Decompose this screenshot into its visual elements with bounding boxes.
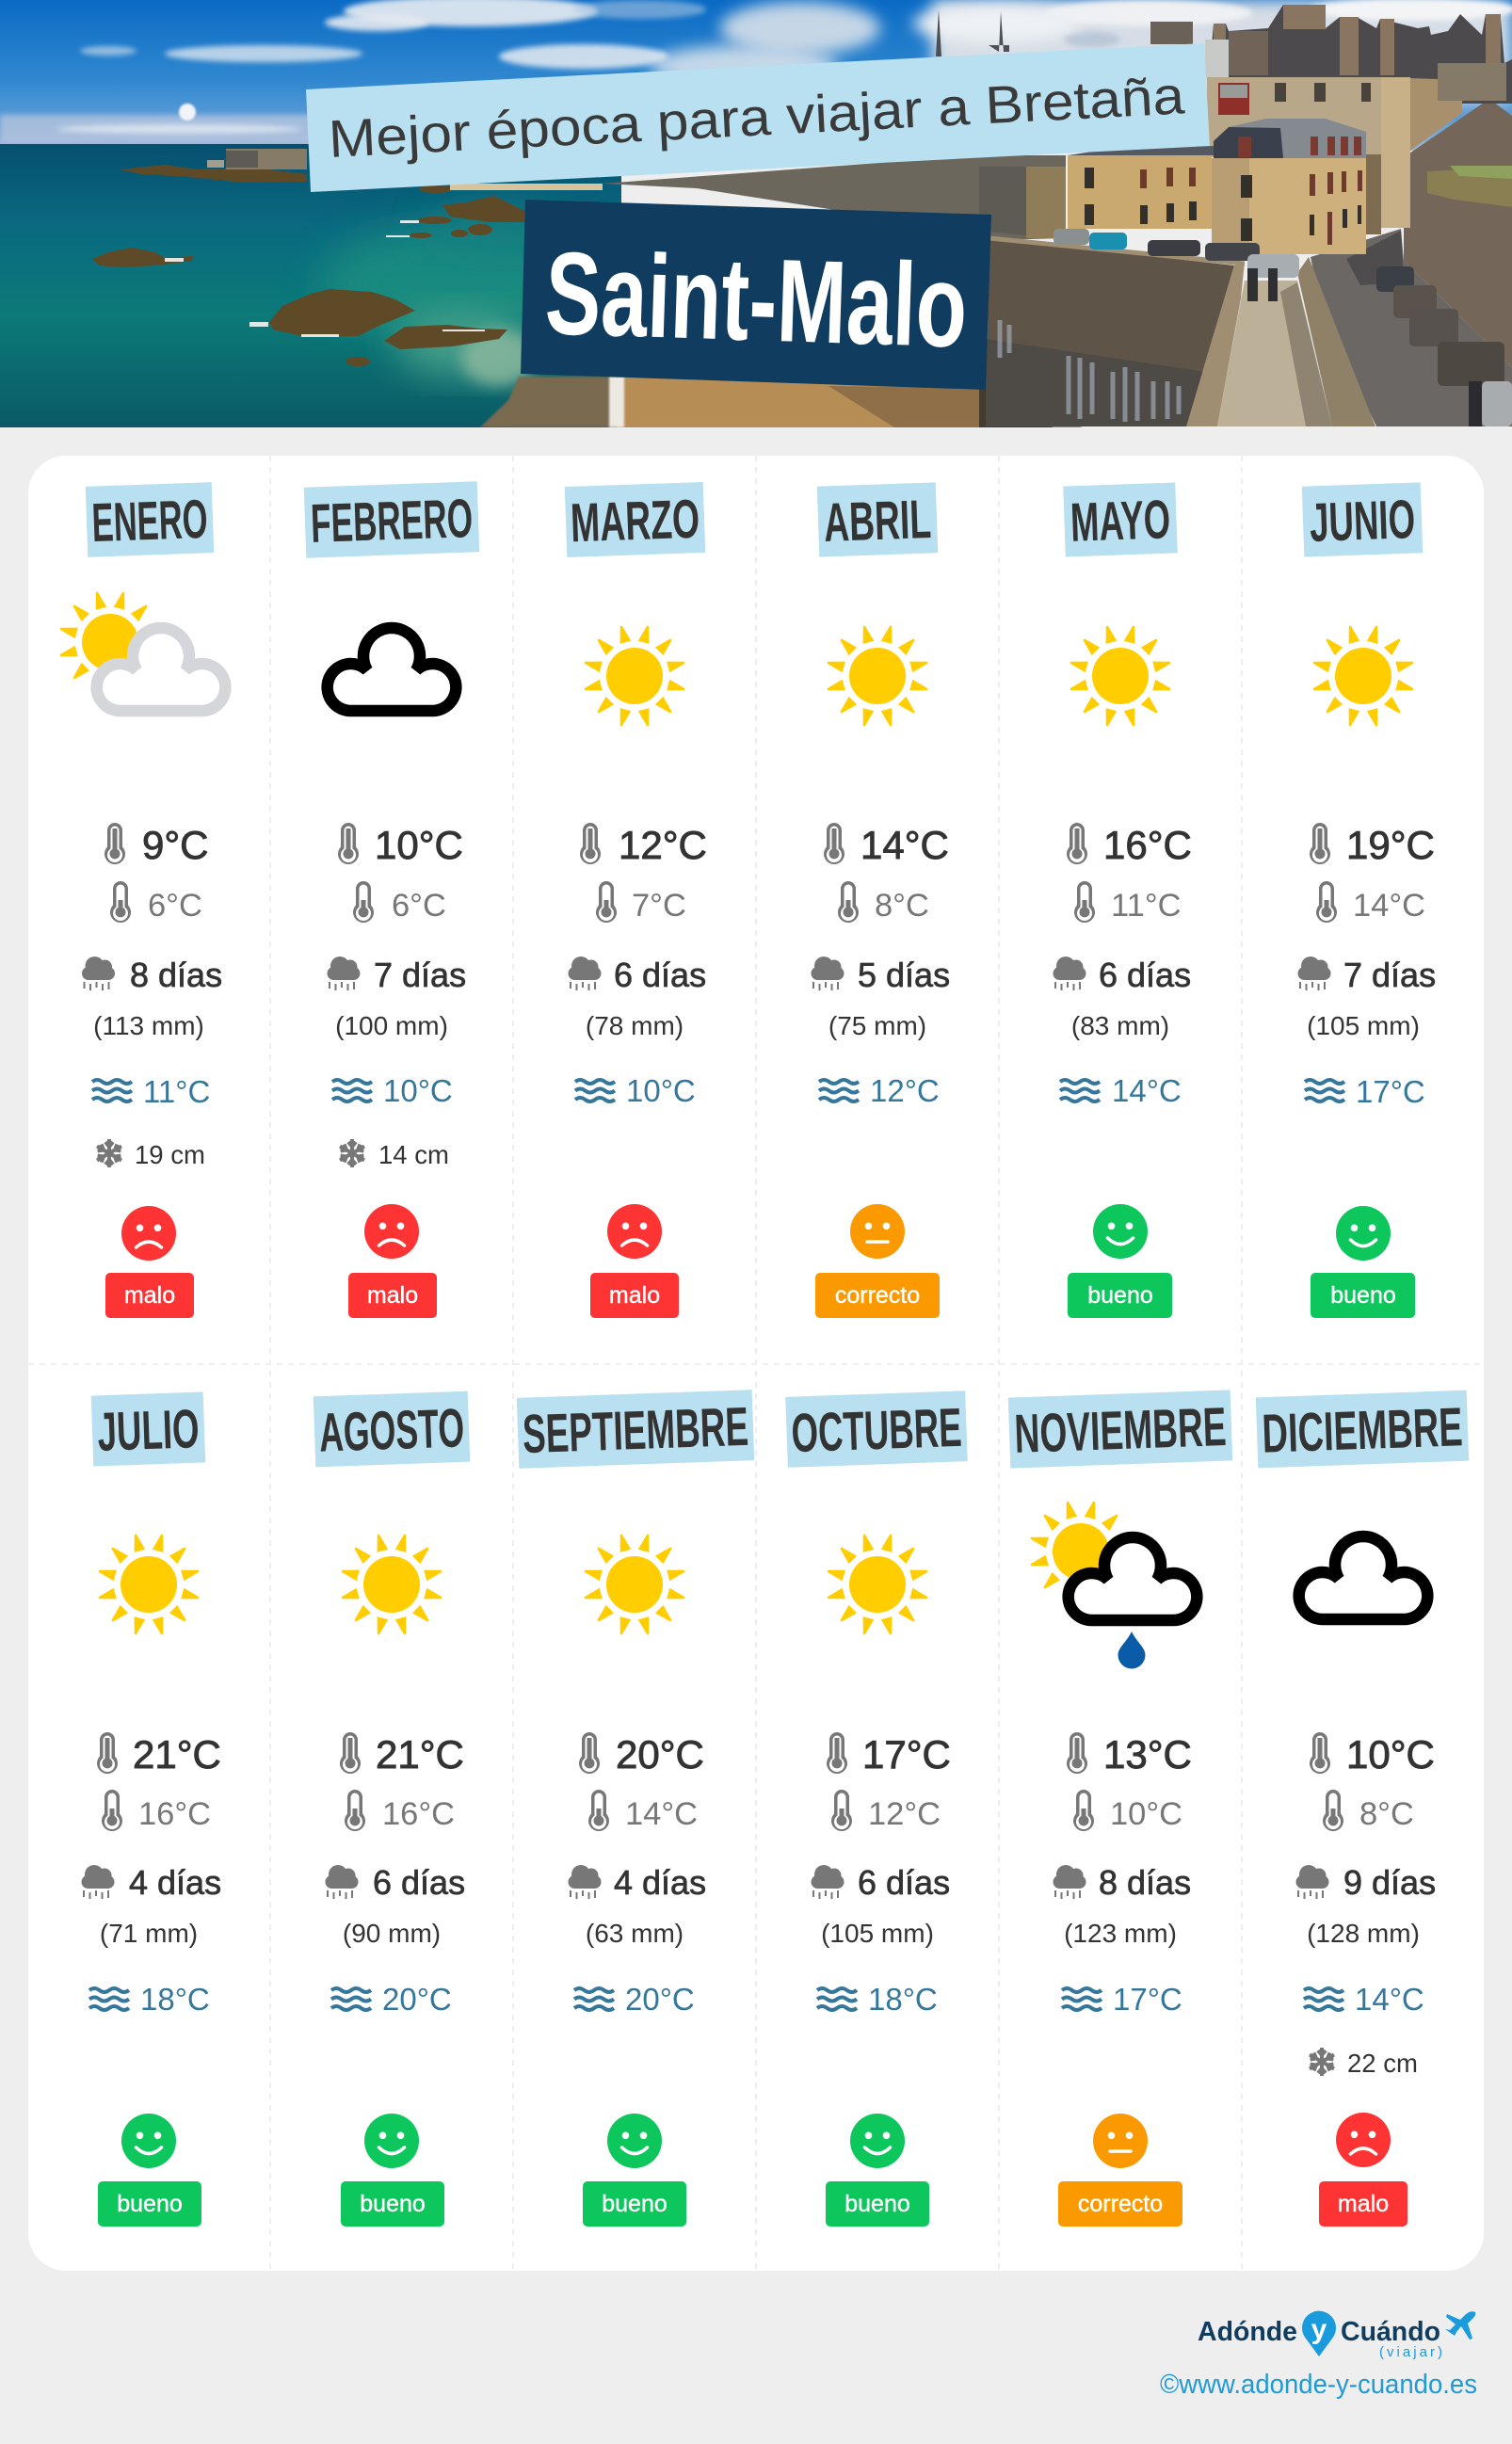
rating: bueno: [98, 2114, 201, 2227]
logo: Adónde y Cuándo (viajar): y: [1311, 2314, 1327, 2345]
sea temperature: [92, 1074, 210, 1109]
column: agosto: [314, 1391, 470, 2227]
rainy days: [569, 1863, 706, 1902]
rainfall: (75 mm): [828, 1011, 926, 1040]
rating: bueno: [826, 2114, 929, 2227]
sea temperature: [89, 1982, 210, 2017]
rainy days: 4 días: [614, 1863, 706, 1902]
sea temperature: 11°C: [143, 1074, 210, 1109]
max temperature: 14°C: [861, 823, 949, 867]
title banner: Mejor época para viajar a Bretaña: [306, 43, 1210, 192]
month label: NOVIEMBRE: [1013, 1396, 1228, 1465]
rating: bueno: bueno: [844, 2191, 910, 2217]
sea temperature: [575, 1073, 696, 1108]
max temperature: 10°C: [1346, 1732, 1435, 1777]
min temperature: 14°C: [625, 1796, 698, 1832]
rating: correcto: [1058, 2114, 1182, 2227]
rating: correcto: [815, 1204, 940, 1318]
rainy days: 7 días: [374, 956, 466, 994]
icon: cloud: [328, 628, 456, 711]
column: octubre: [785, 1391, 968, 2227]
rainy days: [569, 956, 706, 994]
month label: FEBRERO: [310, 488, 474, 555]
rainy days: 5 días: [858, 956, 950, 994]
column: marzo: [565, 482, 707, 1318]
rating: malo: [348, 1204, 437, 1318]
sea temperature: 14°C: [1355, 1982, 1424, 2017]
sea temperature: 18°C: [140, 1982, 210, 2017]
rating: malo: [1319, 2113, 1407, 2227]
min temperature: 8°C: [875, 888, 929, 924]
rainy days: [326, 1863, 465, 1902]
logo: Adónde y Cuándo (viajar): Adónde: [1198, 2317, 1297, 2347]
rocks and islets: [92, 165, 526, 366]
rainy days: 8 días: [130, 956, 222, 994]
max temperature: 9°C: [142, 823, 209, 867]
snow: [1308, 2048, 1418, 2078]
max temperature: 12°C: [619, 823, 707, 867]
min temperature: [345, 1790, 455, 1832]
min temperature: [588, 1790, 698, 1832]
panel: monthly climate table: [28, 456, 1484, 2271]
snow: 19 cm: [135, 1140, 205, 1169]
rainfall: (105 mm): [821, 1919, 934, 1948]
logo: Adónde y Cuándo (viajar): Cuándo: [1341, 2317, 1440, 2347]
icon: sun: [826, 1533, 929, 1636]
rating: malo: malo: [367, 1282, 418, 1309]
rating: malo: malo: [124, 1282, 175, 1309]
rainfall: (105 mm): [1307, 1011, 1420, 1040]
month label: [817, 482, 938, 557]
min temperature: [596, 881, 686, 924]
rainfall: (83 mm): [1071, 1011, 1169, 1040]
min temperature: [831, 1790, 941, 1832]
min temperature: [1073, 1790, 1182, 1832]
sea temperature: [1304, 1982, 1424, 2017]
rating: malo: [105, 1206, 194, 1318]
icon: plane: [1445, 2311, 1475, 2339]
min temperature: 8°C: [1359, 1796, 1414, 1832]
month label: MARZO: [570, 489, 700, 554]
sea temperature: [332, 1073, 453, 1108]
snow: 22 cm: [1347, 2049, 1418, 2078]
rating: bueno: [1311, 1206, 1415, 1318]
sea temperature: 20°C: [625, 1982, 695, 2017]
rainy days: [812, 956, 950, 994]
rating: bueno: bueno: [1087, 1282, 1153, 1309]
rating: bueno: bueno: [1330, 1282, 1396, 1309]
column: febrero: [304, 481, 479, 1318]
rainy days: 7 días: [1343, 956, 1436, 994]
month label: [785, 1391, 968, 1468]
icon: sun: [1069, 624, 1172, 728]
sea temperature: [819, 1073, 940, 1108]
icon: sun: [583, 624, 686, 728]
month label: [304, 481, 479, 558]
header photo: Saint-Malo coast and ramparts: [0, 0, 1512, 427]
max temperature: [580, 823, 707, 867]
min temperature: 10°C: [1110, 1796, 1182, 1832]
rainfall: (63 mm): [586, 1919, 684, 1948]
min temperature: [838, 881, 929, 924]
sea temperature: 10°C: [626, 1073, 696, 1108]
rainy days: [328, 956, 466, 994]
min temperature: [1074, 881, 1182, 924]
min temperature: [1316, 881, 1425, 924]
rating: bueno: [1068, 1204, 1172, 1318]
max temperature: 16°C: [1103, 823, 1192, 867]
rating: correcto: correcto: [1078, 2191, 1163, 2217]
column: julio: [81, 1391, 221, 2227]
max temperature: 17°C: [862, 1732, 951, 1777]
snow: [338, 1139, 449, 1169]
rating: malo: malo: [609, 1282, 660, 1309]
sea temperature: [1062, 1982, 1182, 2017]
icon: cloud: [1299, 1536, 1427, 1619]
month label: ABRIL: [823, 489, 932, 554]
rainy days: 6 días: [858, 1863, 950, 1902]
min temperature: [1323, 1790, 1414, 1832]
month label: [1302, 482, 1423, 557]
rainfall: (71 mm): [100, 1919, 198, 1948]
column: enero: [58, 482, 225, 1318]
rating: malo: [590, 1204, 679, 1318]
icon: sun: [340, 1533, 443, 1636]
rainy days: [82, 956, 222, 994]
min temperature: 6°C: [148, 888, 202, 924]
min temperature: 11°C: [1111, 888, 1182, 924]
min temperature: 16°C: [138, 1796, 211, 1832]
month label: JUNIO: [1309, 489, 1416, 554]
max temperature: 20°C: [616, 1732, 704, 1777]
month label: SEPTIEMBRE: [522, 1396, 749, 1465]
sea temperature: 10°C: [383, 1073, 453, 1108]
rainfall: (100 mm): [335, 1011, 448, 1040]
max temperature: 21°C: [133, 1732, 221, 1777]
rainy days: 6 días: [614, 956, 706, 994]
column: mayo: [1053, 482, 1192, 1318]
rating: malo: malo: [1338, 2191, 1389, 2217]
ramparts: [987, 241, 1234, 372]
month label: ENERO: [90, 489, 209, 554]
rainfall: (78 mm): [586, 1011, 684, 1040]
rainy days: [81, 1863, 221, 1902]
town houses: [1207, 5, 1512, 104]
month label: [517, 1390, 754, 1469]
sea temperature: 20°C: [382, 1982, 452, 2017]
rainy days: [1053, 956, 1191, 994]
max temperature: 10°C: [375, 823, 463, 867]
month label: [1063, 482, 1178, 557]
rainy days: 4 días: [129, 1863, 221, 1902]
rainfall: (90 mm): [343, 1919, 441, 1948]
icon: sun: [1311, 624, 1415, 728]
rainy days: 6 días: [1099, 956, 1191, 994]
month label: MAYO: [1070, 489, 1171, 554]
sea temperature: [331, 1982, 452, 2017]
parked cars and walkers: [1054, 229, 1512, 426]
sea temperature: 18°C: [868, 1982, 938, 2017]
rainy days: 8 días: [1099, 1863, 1191, 1902]
max temperature: 19°C: [1346, 823, 1435, 867]
rainfall: (128 mm): [1307, 1919, 1420, 1948]
sea temperature: 17°C: [1113, 1982, 1182, 2017]
title banner: Saint-Malo: Saint-Malo: [543, 228, 969, 372]
snow: [95, 1139, 205, 1169]
rainfall: (123 mm): [1064, 1919, 1177, 1948]
title banner: Mejor época para viajar a Bretaña: Mejor época para viajar a Bretaña: [327, 65, 1186, 169]
month label: [86, 482, 214, 557]
icon: sun: [583, 1533, 686, 1636]
rainy days: [1295, 1863, 1436, 1902]
min temperature: 12°C: [868, 1796, 941, 1832]
month label: [91, 1391, 205, 1467]
min temperature: 16°C: [382, 1796, 455, 1832]
icon: sun: [97, 1533, 201, 1636]
min temperature: 14°C: [1353, 888, 1425, 924]
website credit: ©www.adonde-y-cuando.es: [1160, 2370, 1477, 2400]
rating: bueno: bueno: [117, 2191, 183, 2217]
column: abril: [812, 482, 950, 1318]
min temperature: 7°C: [632, 888, 686, 924]
sea temperature: [817, 1982, 938, 2017]
rainfall: (113 mm): [93, 1011, 204, 1040]
max temperature: [105, 823, 209, 867]
min temperature: [353, 881, 446, 924]
min temperature: [102, 1790, 211, 1832]
sea temperature: 14°C: [1112, 1073, 1182, 1108]
snow: 14 cm: [378, 1140, 449, 1169]
rainy days: [812, 1863, 950, 1902]
icon: sun, cloud and rain drop: [1029, 1500, 1197, 1668]
street and right wall: [1311, 229, 1512, 426]
title banner: Saint-Malo: [521, 200, 991, 390]
min temperature: 6°C: [392, 888, 446, 924]
month label: [314, 1391, 470, 1467]
month label: [1008, 1390, 1232, 1469]
column: septiembre: [517, 1390, 754, 2227]
month label: OCTUBRE: [790, 1397, 963, 1464]
rating: bueno: bueno: [360, 2191, 426, 2217]
sea temperature: [1060, 1073, 1182, 1108]
column: diciembre: [1256, 1391, 1469, 2227]
column: noviembre: [1008, 1390, 1232, 2227]
rainy days: [1053, 1863, 1191, 1902]
rainy days: 6 días: [373, 1863, 465, 1902]
month label: [565, 482, 705, 557]
logo: Adónde y Cuándo (viajar): (viajar): [1379, 2344, 1442, 2360]
rating: bueno: bueno: [602, 2191, 668, 2217]
icon: location pin: [1302, 2311, 1336, 2356]
sea temperature: 12°C: [870, 1073, 940, 1108]
max temperature: 13°C: [1103, 1732, 1192, 1777]
rating: bueno: [583, 2114, 686, 2227]
sea temperature: [574, 1982, 695, 2017]
logo: Adónde y Cuándo (viajar): [1198, 2311, 1475, 2360]
month label: JULIO: [96, 1398, 201, 1463]
icon: sun behind grey cloud: [58, 590, 225, 711]
icon: sun: [826, 624, 929, 728]
max temperature: 21°C: [376, 1732, 464, 1777]
column: junio: [1297, 482, 1436, 1318]
rating: bueno: [341, 2114, 444, 2227]
rainy days: 9 días: [1343, 1863, 1436, 1902]
sea temperature: 17°C: [1356, 1074, 1425, 1109]
rating: correcto: correcto: [835, 1282, 920, 1309]
month label: AGOSTO: [318, 1397, 465, 1464]
rainy days: [1297, 956, 1436, 994]
sea temperature: [1305, 1074, 1425, 1109]
min temperature: [110, 881, 202, 924]
